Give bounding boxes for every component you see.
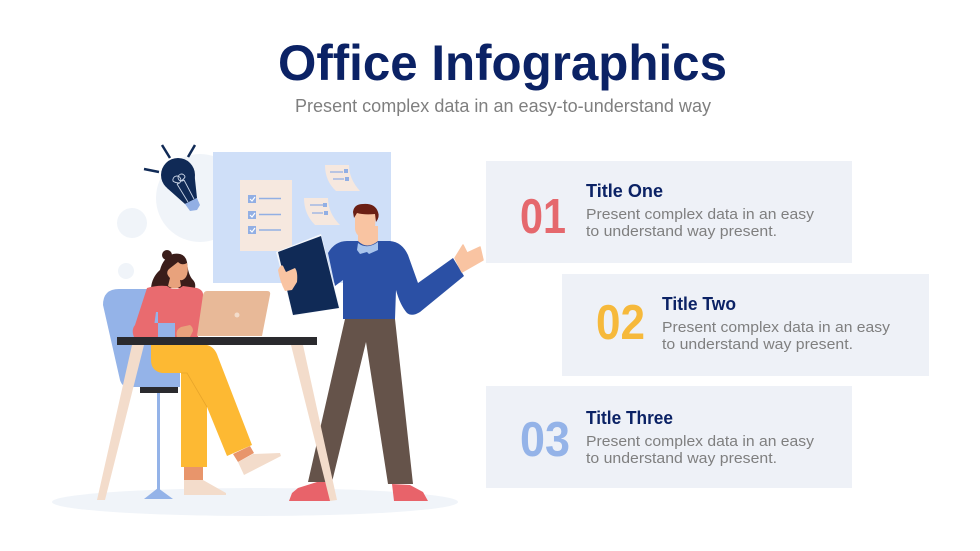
title: Office Infographics xyxy=(278,35,727,91)
desk xyxy=(97,337,337,501)
card 03 xyxy=(486,386,852,488)
laptop xyxy=(197,291,270,336)
card 02: Present complex data in an easy xyxy=(662,319,891,336)
card 02 xyxy=(562,274,929,376)
card 01 xyxy=(486,161,852,263)
card 02: Title Two xyxy=(662,294,736,314)
man xyxy=(276,204,483,501)
card 01: 01 xyxy=(520,190,566,244)
card 03: to understand way present. xyxy=(586,450,777,467)
floor shadow xyxy=(52,488,458,516)
icon: light bulb xyxy=(144,145,200,211)
woman xyxy=(133,250,281,495)
background circles xyxy=(117,154,244,279)
card 01: to understand way present. xyxy=(586,223,777,240)
card 02: 02 xyxy=(596,296,645,350)
bulletin board xyxy=(213,152,391,283)
card 03: 03 xyxy=(520,413,570,467)
card 01: Present complex data in an easy xyxy=(586,206,815,223)
card 03: Present complex data in an easy xyxy=(586,433,815,450)
card 03: Title Three xyxy=(586,408,673,428)
illustration: office scene xyxy=(52,145,483,516)
chair xyxy=(103,289,180,499)
card 02: to understand way present. xyxy=(662,336,853,353)
card 01: Title One xyxy=(586,181,663,201)
subtitle: Present complex data in an easy-to-understand way xyxy=(295,96,711,116)
